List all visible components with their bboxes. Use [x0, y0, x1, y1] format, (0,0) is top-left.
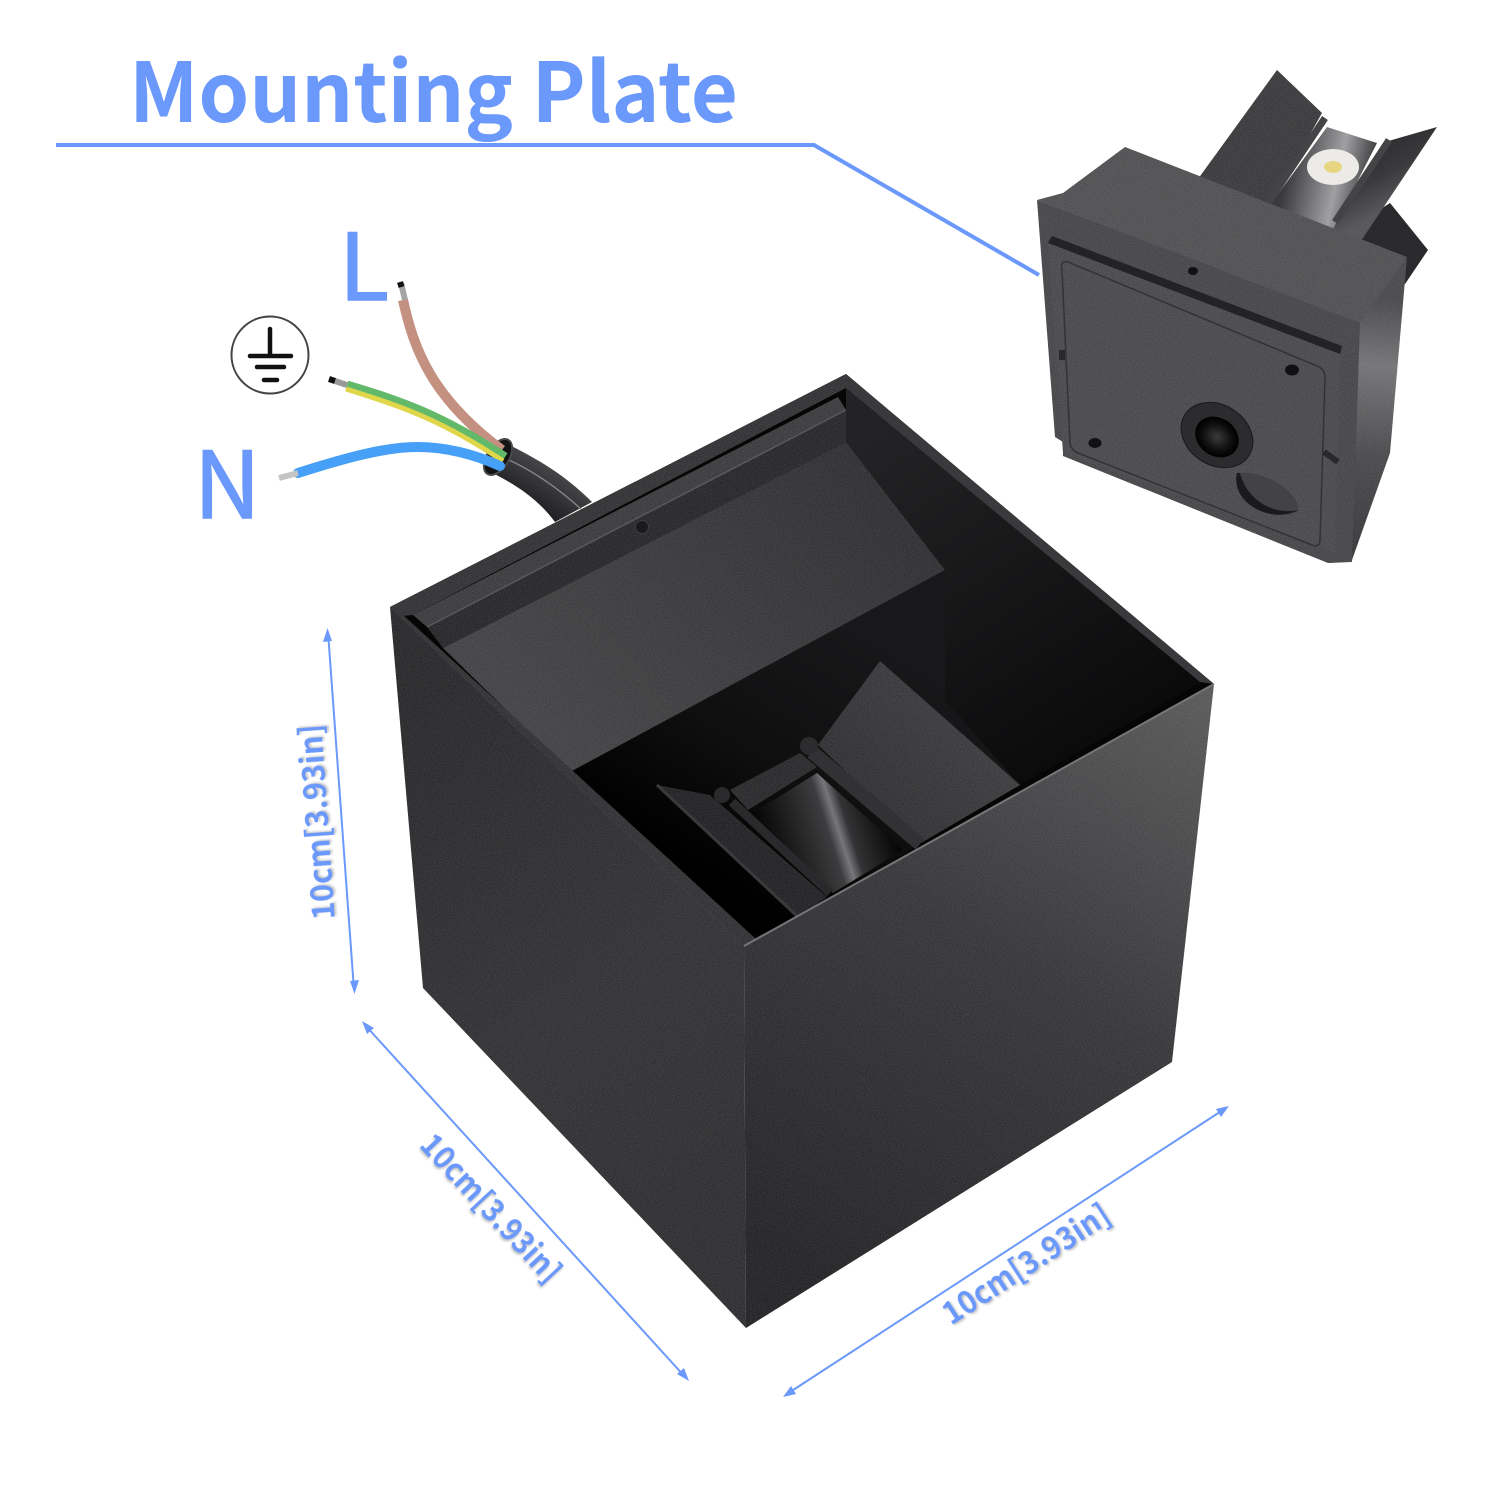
main product: wall light cube — [390, 374, 1214, 1328]
dimension: height — [285, 628, 359, 994]
back right flap — [1320, 127, 1437, 250]
LED channel — [1270, 127, 1377, 235]
screw holes — [1088, 267, 1299, 448]
label: neutral wire N: N — [194, 412, 261, 545]
dimension: width — [783, 1106, 1229, 1397]
top ledge strip — [413, 397, 846, 648]
inner shelf panel — [443, 442, 945, 772]
right side face — [1330, 257, 1407, 563]
dimension: depth — [362, 1021, 689, 1381]
top rail of optic — [730, 753, 817, 810]
left outer face — [390, 607, 746, 1328]
half-moon recess — [1236, 473, 1299, 515]
back rim — [390, 374, 846, 616]
cable grommet — [1169, 389, 1265, 481]
blue neutral wire — [279, 447, 500, 478]
rear shadow flap — [1340, 203, 1428, 287]
right outer face — [744, 684, 1214, 1328]
channel bars — [1270, 118, 1389, 222]
notches — [1062, 350, 1338, 462]
right optic bar — [800, 737, 920, 844]
groove and raised plate — [1048, 236, 1342, 553]
lens reflector — [753, 773, 903, 893]
wall below shelf — [570, 570, 1020, 940]
brown live wire — [400, 282, 502, 450]
leader line to mounting plate — [56, 145, 1039, 275]
left light flap — [657, 785, 830, 917]
right rim — [846, 374, 1214, 684]
label: live wire L: L — [339, 194, 389, 327]
top face — [1037, 147, 1407, 325]
mounting plate product view — [1037, 70, 1437, 563]
black cable sheath — [478, 434, 592, 522]
dimension: height: 10cm[3.93in] — [285, 723, 344, 922]
green-yellow earth wire — [329, 379, 505, 461]
rear right inner wall — [846, 388, 1201, 785]
cable with three wires — [279, 282, 592, 522]
LED chip — [1307, 149, 1359, 185]
dimension: width: 10cm[3.93in] — [931, 1190, 1118, 1333]
front frame — [1037, 200, 1360, 563]
dimension: depth: 10cm[3.93in] — [412, 1121, 574, 1291]
front rim highlights — [744, 684, 1214, 946]
back left flap — [1190, 70, 1322, 215]
left inner rim — [390, 607, 756, 946]
right light flap — [818, 661, 1020, 843]
icon: earth ground symbol — [232, 316, 308, 394]
interior opening — [390, 374, 1214, 946]
title: Mounting Plate — [129, 27, 738, 146]
